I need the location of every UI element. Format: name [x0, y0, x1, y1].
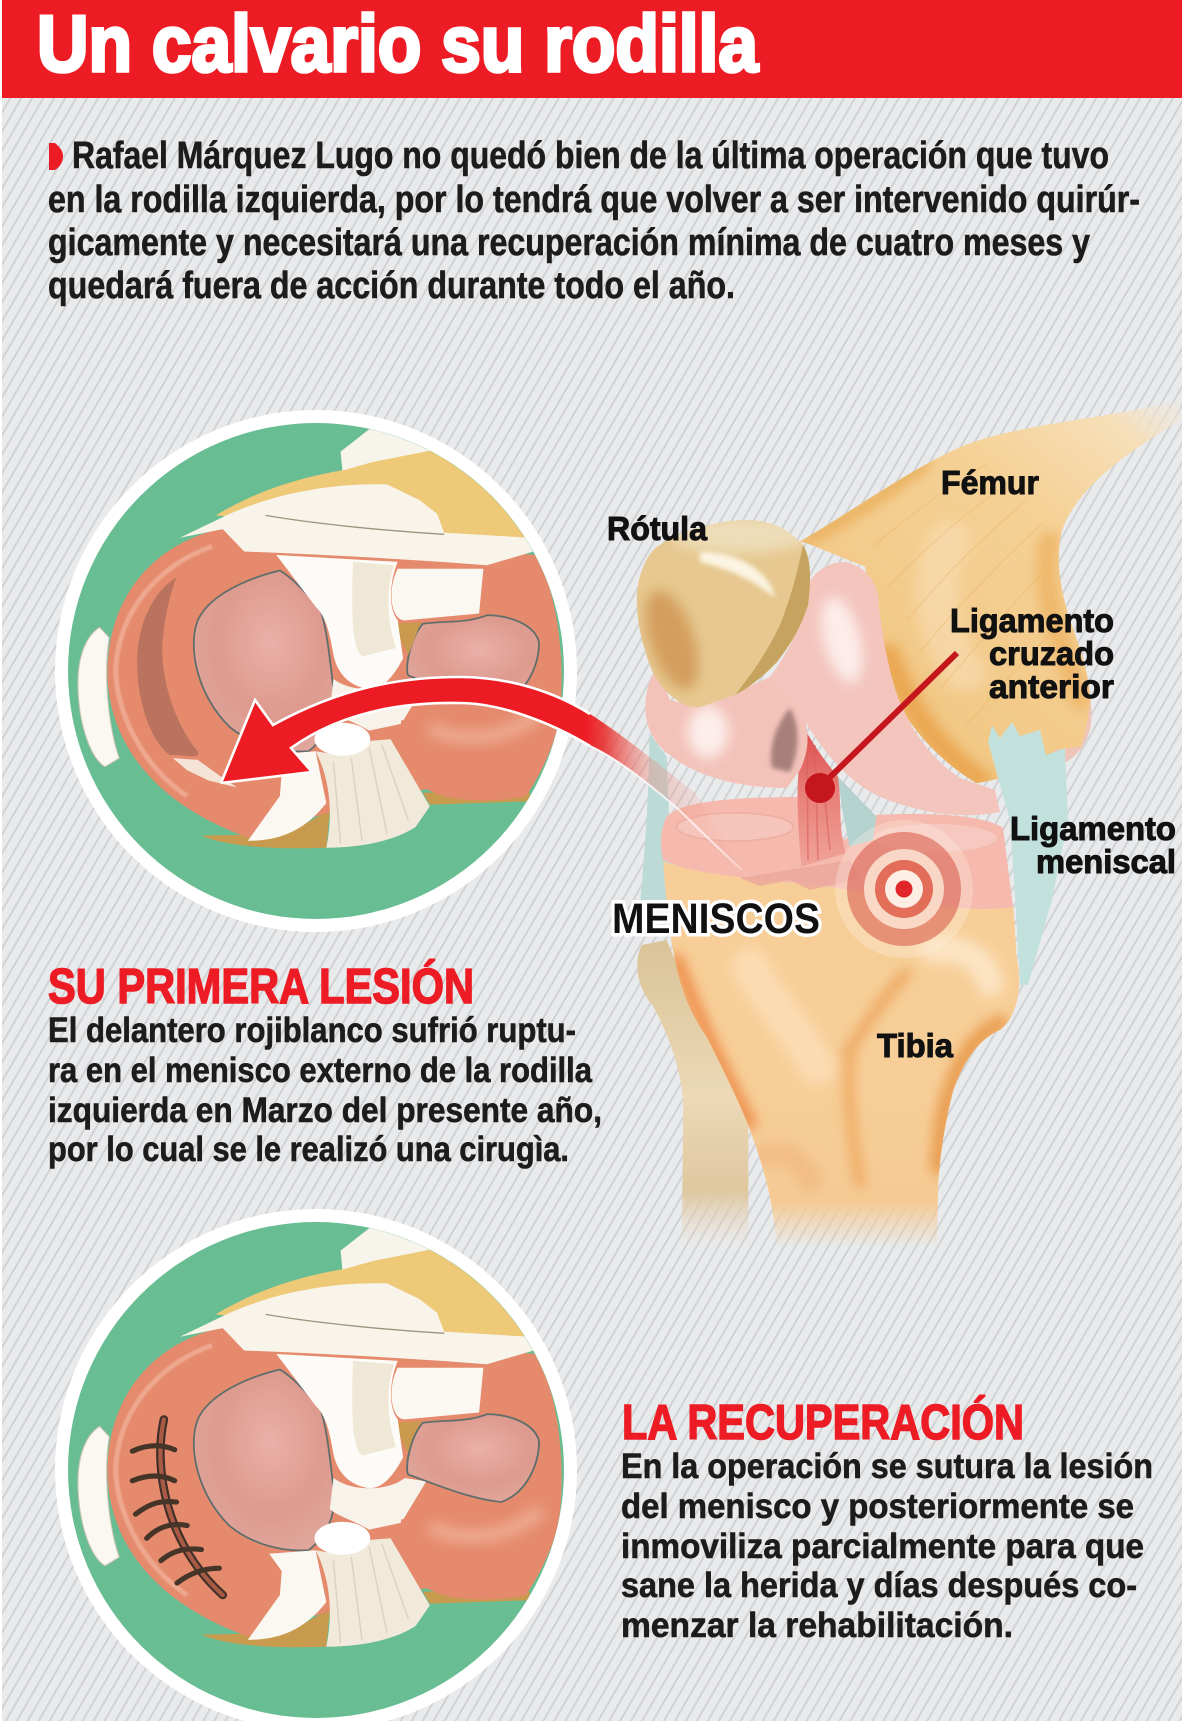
- knee top view: [78, 429, 562, 848]
- patella rim: [735, 545, 811, 695]
- label: Ligamento cruzado anterior: cruzado: [989, 635, 1114, 672]
- illustration: main knee joint: [635, 400, 1181, 1250]
- meniscus right inner surface: [873, 824, 997, 852]
- text block: la recuperación: menzar la rehabilitación.: [621, 1606, 1013, 1645]
- label: Ligamento meniscal: [1010, 810, 1176, 880]
- intro text block: quedará fuera de acción durante todo el año.: [48, 265, 735, 307]
- medial highlight: [814, 593, 870, 687]
- label: Fémur: Fémur: [941, 464, 1039, 501]
- label: Ligamento meniscal: Ligamento: [1010, 810, 1176, 847]
- text block: la recuperación: sane la herida y días después co-: [621, 1566, 1137, 1605]
- patella lower shade: [640, 586, 704, 694]
- lower bundle: [316, 739, 430, 848]
- top ligament band: [180, 484, 533, 565]
- torn fringe: [173, 758, 237, 787]
- title banner: Un calvario su rodilla: [37, 0, 758, 88]
- title banner: [2, 0, 1182, 98]
- bundle cap: [315, 723, 370, 756]
- text block: su primera lesión: por lo cual se le realizó una cirugìa.: [48, 1130, 569, 1169]
- label: Ligamento cruzado anterior: [950, 602, 1114, 705]
- anterior cruciate ligament: [798, 733, 846, 867]
- medial condyle cartilage: [770, 562, 1000, 815]
- femur: [799, 400, 1181, 783]
- tibia: [663, 862, 1019, 1250]
- right plateau lower lobe: [407, 1414, 539, 1502]
- suture: [132, 1419, 223, 1595]
- right white fibres: [391, 569, 483, 620]
- left white pad: [78, 627, 119, 767]
- lateral highlight: [688, 706, 728, 758]
- heading: LA RECUPERACIÓN: [622, 1395, 1024, 1450]
- target marker on meniscus: [835, 820, 973, 958]
- inset circle: sutured meniscus: [55, 1209, 577, 1729]
- left teal ligament: [638, 733, 672, 930]
- green disc: [68, 423, 564, 919]
- label: Ligamento cruzado anterior: anterior: [989, 668, 1114, 705]
- patella highlight: [700, 552, 775, 598]
- text block: la recuperación: En la operación se sutura la lesión: [621, 1447, 1153, 1486]
- text block: su primera lesión: ra en el menisco externo de la rodilla: [48, 1051, 592, 1090]
- heading: SU PRIMERA LESIÓN: [48, 959, 474, 1014]
- central ligament: [276, 555, 403, 689]
- bundle fibres: [333, 744, 408, 844]
- text block: la recuperación: del menisco y posteriormente se: [621, 1487, 1134, 1526]
- tan gap: [394, 622, 421, 655]
- lower left white fibres: [248, 751, 326, 841]
- right plateau: [407, 615, 539, 703]
- white ring: [55, 1209, 577, 1729]
- text block: su primera lesión: El delantero rojiblanco sufrió ruptu-: [48, 1011, 576, 1050]
- meniscus ring: [661, 797, 1013, 909]
- text block: su primera lesión: [48, 959, 602, 1169]
- knee top view: [78, 1228, 562, 1647]
- notch shadow: [771, 708, 798, 772]
- text block: la recuperación: inmoviliza parcialmente para que: [621, 1527, 1144, 1566]
- right pink condyle edge: [1054, 700, 1092, 765]
- lower bone: [201, 793, 530, 848]
- central ligament column: [352, 562, 396, 657]
- tibia shading: [677, 949, 1000, 1183]
- band shadow lines: [266, 515, 444, 534]
- left plateau: [194, 570, 334, 752]
- right teal ligament: [988, 722, 1068, 985]
- lobe highlight: [430, 710, 541, 737]
- green disc: [68, 1222, 564, 1718]
- right meniscus lower lobe: [400, 669, 558, 801]
- meniscus inner surface: [677, 813, 793, 841]
- leader line: ligamento cruzado anterior: [805, 653, 957, 803]
- patella: [635, 517, 811, 707]
- white tendon top: [341, 429, 433, 471]
- label: Tibia: Tibia: [877, 1027, 954, 1064]
- red arrow from meniscus to inset: [221, 677, 742, 870]
- lower middle ligament: [330, 679, 426, 731]
- white ring: [55, 410, 577, 932]
- ligament fibres fan: [740, 860, 860, 890]
- knee silhouette: [108, 529, 562, 837]
- patella pale top: [670, 517, 810, 553]
- text block: la recuperación: [621, 1395, 1153, 1645]
- femur shading: [807, 463, 1080, 780]
- label: MENISCOS: MENISCOS: [612, 895, 820, 943]
- label: Ligamento cruzado anterior: Ligamento: [950, 602, 1114, 639]
- inset circle: injured meniscus: [55, 410, 577, 932]
- text block: su primera lesión: izquierda en Marzo del presente año,: [48, 1091, 602, 1130]
- meniscus rim highlight: [116, 546, 212, 796]
- icon: red bullet: [49, 143, 63, 170]
- label: Ligamento meniscal: meniscal: [1036, 843, 1176, 880]
- meniscus tear: [137, 577, 198, 756]
- intro text block: [48, 135, 1140, 307]
- central teal ligament: [838, 777, 876, 847]
- lateral condyle cartilage: [645, 668, 808, 788]
- upper bone: [216, 445, 537, 541]
- fibula: [637, 940, 748, 1247]
- label: Rótula: Rótula: [607, 510, 708, 547]
